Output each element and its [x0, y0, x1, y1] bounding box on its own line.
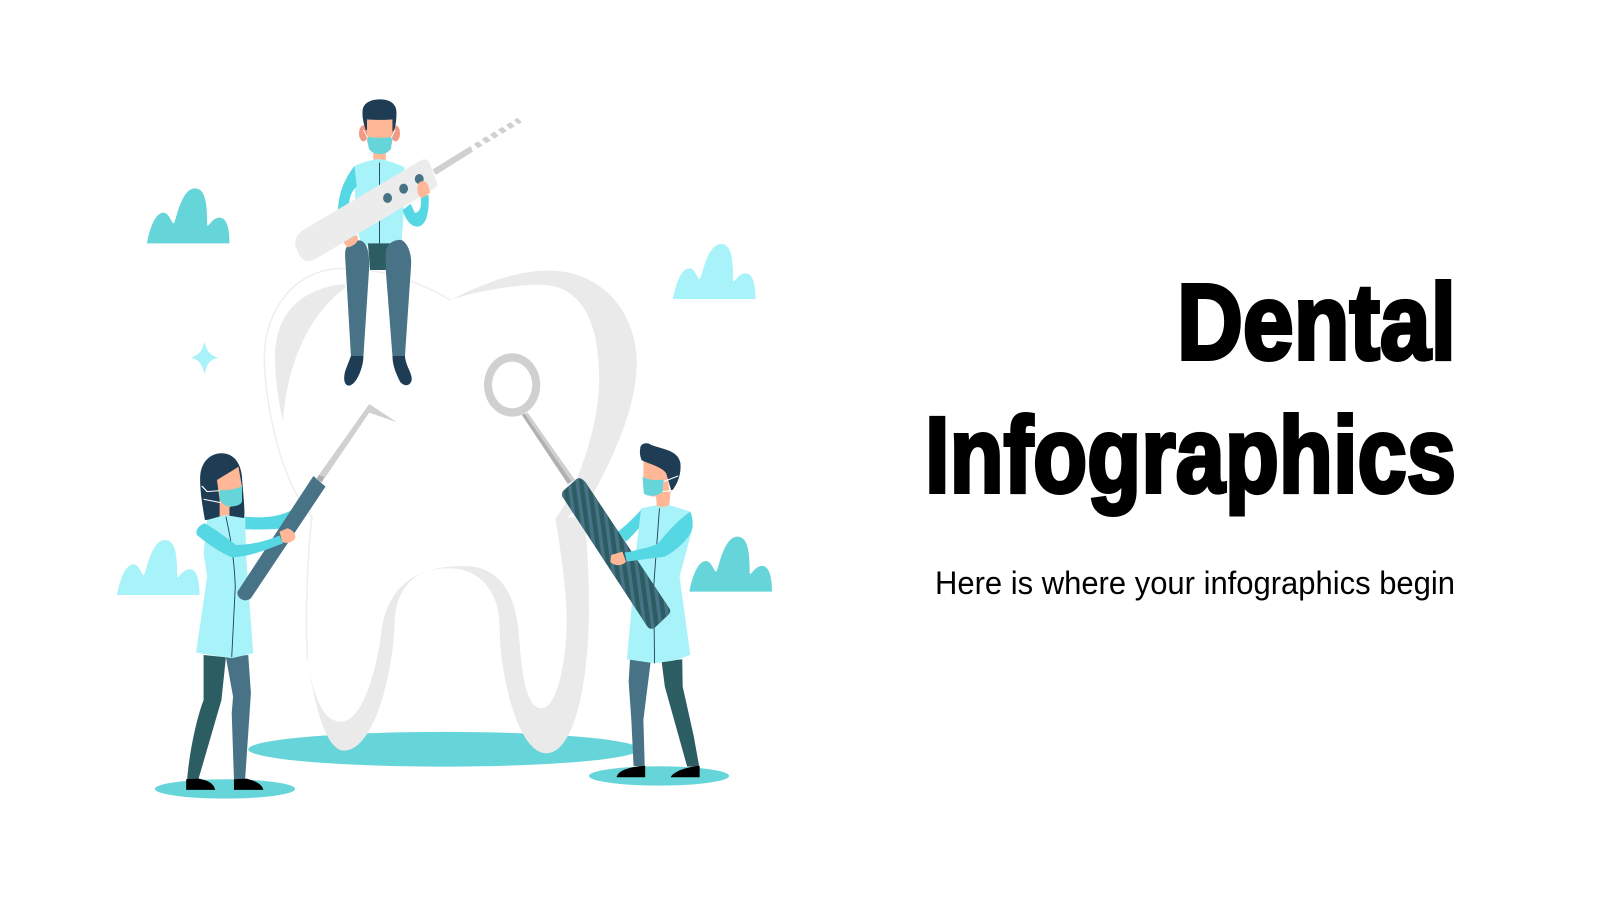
- icon: sparkle: [191, 342, 218, 374]
- cloud: bottom left light: [117, 540, 200, 595]
- ground ellipse: tooth: [248, 732, 639, 767]
- illustration: dentists and tooth: [117, 99, 772, 799]
- cloud: top right light: [673, 244, 755, 299]
- title line: Dental: Dental: [1177, 261, 1456, 382]
- subtitle: Here is where your infographics begin: [935, 565, 1455, 601]
- right dentist: [562, 443, 700, 778]
- ground ellipse: left dentist: [155, 779, 295, 799]
- top dentist with syringe: [295, 99, 520, 386]
- slide canvas: [117, 99, 1454, 799]
- dental probe: [319, 404, 397, 478]
- cloud: bottom right teal: [689, 537, 772, 592]
- dental mirror: [484, 353, 575, 484]
- title line: Infographics: Infographics: [925, 394, 1456, 515]
- tooth: [264, 268, 637, 753]
- cloud: top left teal: [147, 188, 229, 243]
- title: [925, 261, 1456, 515]
- left dentist: [186, 453, 325, 790]
- ground ellipse: right dentist: [589, 766, 729, 786]
